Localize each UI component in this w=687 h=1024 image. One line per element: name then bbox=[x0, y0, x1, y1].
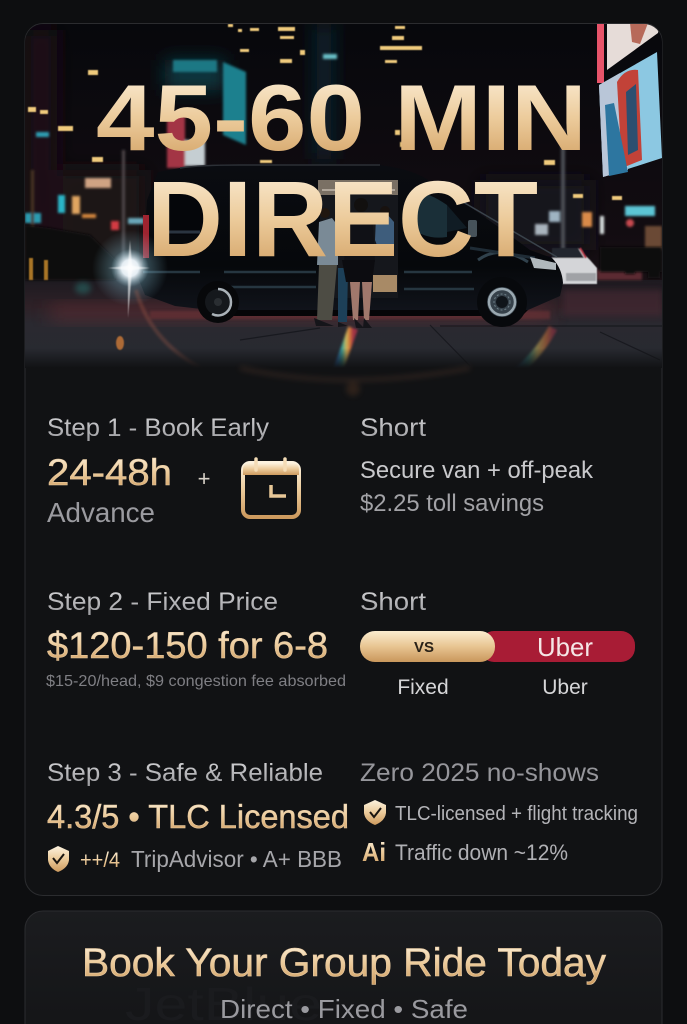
pill legend: Fixed bbox=[397, 676, 449, 699]
crowd silhouettes bbox=[25, 225, 662, 280]
flight tracking note: TLC-licensed + flight tracking bbox=[395, 803, 638, 825]
panel: main card bbox=[25, 23, 662, 896]
step 1 stat label: Advance bbox=[47, 497, 155, 528]
step 1 short heading: Short bbox=[360, 414, 426, 442]
step 1 heading: Step 1 - Book Early bbox=[47, 414, 270, 442]
step 1 bbox=[47, 414, 594, 528]
hero title: 45-60 MIN bbox=[96, 66, 587, 171]
panel: call to action bbox=[25, 911, 662, 1024]
icon: shield bbox=[364, 800, 386, 825]
CTA heading: Book Your Group Ride Today bbox=[82, 941, 606, 985]
van bbox=[139, 165, 563, 316]
van wheels bbox=[197, 286, 527, 327]
group of people bbox=[314, 198, 394, 328]
step 2 price: $120-150 for 6-8 bbox=[47, 625, 328, 666]
lens flare bbox=[75, 230, 553, 372]
soft rainbow remainder under photo bbox=[240, 368, 470, 396]
icon: AI: Ai bbox=[362, 837, 386, 867]
pill legend bbox=[397, 676, 588, 699]
step 2 heading: Step 2 - Fixed Price bbox=[47, 588, 278, 616]
step 2 bbox=[46, 588, 635, 699]
white car bbox=[550, 248, 597, 284]
step 1 details bbox=[360, 457, 594, 517]
rating symbols: ++/4 bbox=[80, 849, 120, 872]
CTA subheading: Direct • Fixed • Safe bbox=[220, 994, 468, 1024]
step 2 footnote: $15-20/head, $9 congestion fee absorbed bbox=[46, 673, 346, 690]
hero photo: night street with black van bbox=[25, 23, 662, 372]
plus sign: + bbox=[198, 466, 210, 491]
traffic note: Traffic down ~12% bbox=[395, 840, 568, 865]
hero title bbox=[96, 66, 587, 279]
review sources: TripAdvisor • A+ BBB bbox=[131, 846, 342, 872]
pill legend: Uber bbox=[542, 676, 588, 699]
hero title: DIRECT bbox=[147, 159, 538, 279]
step 1 details: $2.25 toll savings bbox=[360, 490, 544, 517]
step 3 bbox=[47, 759, 638, 872]
icon: calendar bbox=[243, 459, 299, 517]
step 2 short heading: Short bbox=[360, 588, 426, 616]
step 1 details: Secure van + off-peak bbox=[360, 457, 594, 484]
comparison pill: fixed vs uber bbox=[360, 631, 635, 662]
step 3 rating: 4.3/5 • TLC Licensed bbox=[47, 798, 349, 835]
comparison pill: fixed vs uber: VS bbox=[414, 639, 434, 656]
step 3 heading: Step 3 - Safe & Reliable bbox=[47, 759, 323, 787]
street surface bbox=[25, 280, 662, 368]
billboards bbox=[597, 23, 662, 177]
no-shows heading: Zero 2025 no-shows bbox=[360, 759, 599, 787]
step 1 stat: 24-48h bbox=[47, 452, 172, 493]
comparison pill: fixed vs uber: Uber bbox=[537, 632, 593, 662]
icon: shield bbox=[48, 846, 69, 872]
